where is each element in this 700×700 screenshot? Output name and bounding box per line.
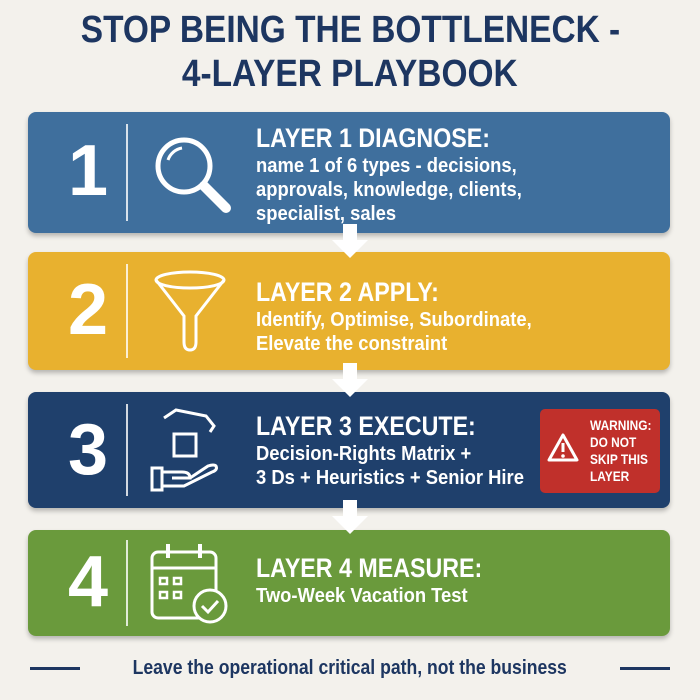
icon: hand with box xyxy=(150,408,218,492)
icon: calendar check xyxy=(150,544,228,624)
arrow 1 xyxy=(332,224,368,258)
number 1: 1 xyxy=(68,131,108,211)
text: layer 2 xyxy=(256,277,532,355)
panel: layer 2 xyxy=(28,252,670,370)
icon: funnel xyxy=(154,270,226,352)
footer: Leave the operational critical path, not the business xyxy=(133,657,567,679)
text: layer 4: Two-Week Vacation Test xyxy=(256,585,468,607)
text: layer 4: LAYER 4 MEASURE: xyxy=(256,553,482,583)
footer xyxy=(30,657,670,679)
callout: warning: SKIP THIS xyxy=(590,451,648,467)
text: layer 1 xyxy=(256,123,522,225)
arrow 3 xyxy=(332,500,368,534)
title: 4-LAYER PLAYBOOK xyxy=(182,53,518,95)
text: layer 3 xyxy=(256,411,524,489)
text: layer 1: LAYER 1 DIAGNOSE: xyxy=(256,123,490,153)
icon: warning triangle xyxy=(548,433,579,462)
panel: layer 4 xyxy=(28,530,670,636)
callout: warning: DO NOT xyxy=(590,434,636,450)
text: layer 1: specialist, sales xyxy=(256,203,396,225)
text: layer 1: name 1 of 6 types - decisions, xyxy=(256,155,517,177)
text: layer 4 xyxy=(256,553,482,607)
text: layer 2: Elevate the constraint xyxy=(256,333,447,355)
text: layer 3: 3 Ds + Heuristics + Senior Hire xyxy=(256,467,524,489)
title: STOP BEING THE BOTTLENECK - xyxy=(80,9,620,51)
callout: warning: WARNING: xyxy=(590,417,651,433)
number 2: 2 xyxy=(68,270,108,350)
number 4: 4 xyxy=(68,542,108,622)
text: layer 1: approvals, knowledge, clients, xyxy=(256,179,522,201)
icon: magnifier xyxy=(156,138,231,213)
arrow 2 xyxy=(332,363,368,397)
panel: layer 1 xyxy=(28,112,670,233)
text: layer 3: Decision-Rights Matrix + xyxy=(256,443,471,465)
number 3: 3 xyxy=(68,410,108,490)
text: layer 2: Identify, Optimise, Subordinate, xyxy=(256,309,532,331)
callout: warning xyxy=(540,409,660,493)
text: layer 2: LAYER 2 APPLY: xyxy=(256,277,439,307)
title xyxy=(80,9,620,95)
panel: layer 3 xyxy=(28,392,670,508)
text: layer 3: LAYER 3 EXECUTE: xyxy=(256,411,476,441)
callout: warning: LAYER xyxy=(590,468,629,484)
